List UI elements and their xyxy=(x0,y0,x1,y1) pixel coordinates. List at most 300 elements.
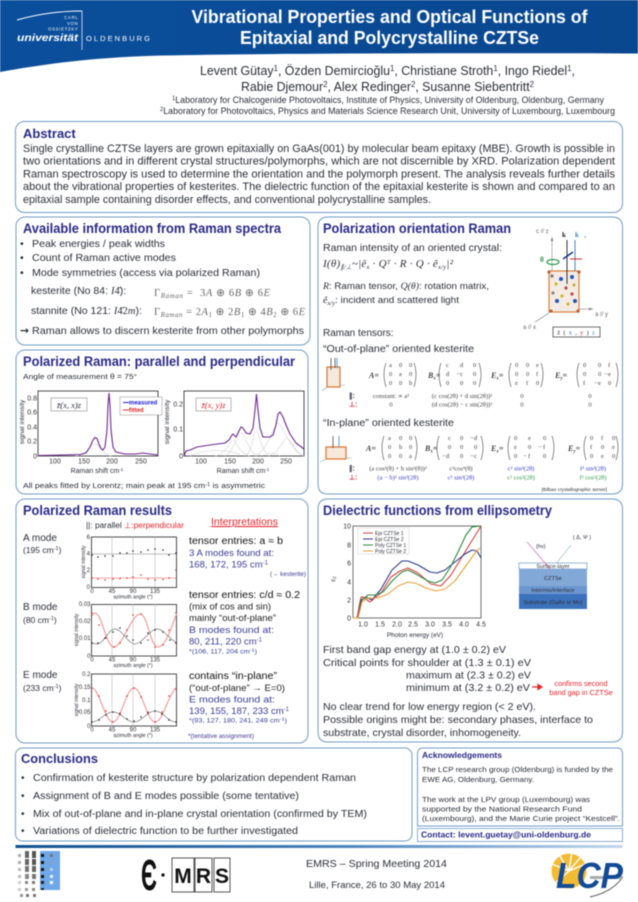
chart: z(x,y)z spectrum: 0.2 xyxy=(173,402,183,408)
icon: crystal unit cell with beams: a // x xyxy=(523,325,536,331)
table: in-plane intensities: ⊥: xyxy=(349,474,357,482)
table: in-plane intensities xyxy=(349,464,607,482)
intensity equation text: ê xyxy=(323,295,327,305)
table: in-plane intensities: c² sin²(2θ) xyxy=(448,474,474,482)
logo: E-MRS: M xyxy=(174,865,192,888)
tensor matrices: in-plane: 00a xyxy=(388,453,412,460)
interpretation: B mode: *(106, 117, 204 cm xyxy=(189,650,239,656)
chart: A mode: 0 xyxy=(90,589,94,595)
bullet list: Mode symmetries (access via polarized Raman) xyxy=(32,267,260,279)
kesterite and stannite formulas: 2 xyxy=(273,311,277,319)
panel: polarization orientation Raman xyxy=(318,217,622,494)
interpretation: A mode: 168, 172, 195 cm xyxy=(189,560,262,570)
authors and affiliations: , Ingo Riedel xyxy=(498,64,567,78)
diagram: ellipsometry layer stack: Substrate (GaAs or Mo) xyxy=(523,600,583,606)
tensor matrices: out-of-plane: 0a0 xyxy=(389,371,412,378)
logo: Universität Oldenburg: CARL xyxy=(64,15,78,20)
intensity equation text: |² xyxy=(446,258,454,270)
kesterite and stannite formulas: ⊕ 2 xyxy=(212,307,233,318)
chart: B mode: 0.02 xyxy=(79,619,91,625)
icon: in-plane cell xyxy=(320,436,352,462)
interpretation: E mode: (“out-of-plane” → E=0) xyxy=(189,683,285,693)
tensor matrices: in-plane: x xyxy=(495,450,499,454)
chart: dielectric function curves: 8 xyxy=(347,542,351,550)
intensity equation text: x xyxy=(366,264,370,271)
interpretation: E mode: ) xyxy=(285,718,287,724)
chart: B mode: 0 xyxy=(87,654,91,660)
polarization key: ||: parallel ⊥:perpendicular xyxy=(86,521,184,530)
interpretation: E mode: contains “in-plane” xyxy=(189,671,277,682)
diagram: ellipsometry layer stack: Surface-layer xyxy=(536,564,570,570)
kesterite and stannite formulas: ⊕ 4 xyxy=(245,307,266,318)
chart: E mode: 0.1 xyxy=(82,698,91,704)
chart: z(x,y)z spectrum: -1 xyxy=(265,467,270,472)
tensor matrices: in-plane: −d0−c xyxy=(442,453,477,460)
tensor matrices: in-plane: c0−d xyxy=(448,435,478,442)
intensity equation text: x/y xyxy=(326,301,336,307)
abstract body text: Single crystalline CZTSe layers are grown epitaxially on GaAs(001) by molecular beam epitaxy (MBE). Growth is possible in xyxy=(23,143,615,155)
tensor matrices: in-plane: x xyxy=(429,450,433,454)
panel: dielectric functions from ellipsometry xyxy=(318,499,622,742)
chart: dielectric function curves: 4.0 xyxy=(459,622,469,628)
chart: E mode: 0 xyxy=(90,728,94,734)
icon: crystal unit cell with beams: s xyxy=(584,234,586,239)
Raman tensor labels: Raman tensors: xyxy=(323,328,394,339)
chart: dielectric function curves: 6 xyxy=(347,560,351,568)
kesterite and stannite formulas xyxy=(31,285,306,319)
logo: Universität Oldenburg: universität xyxy=(17,32,79,44)
icon: crystal unit cell with beams: a // y xyxy=(595,312,608,318)
chart: B mode: azimuth angle (°) xyxy=(113,663,153,669)
tensor matrices: out-of-plane: B xyxy=(428,371,433,380)
chart: B mode: signal intensity xyxy=(74,613,80,646)
chart: z(x,x)z spectrum: 0.8 xyxy=(27,396,37,402)
panel: polarized Raman results xyxy=(16,499,308,743)
legend measured / fitted: fitted xyxy=(129,408,144,414)
abstract body text: Raman spectroscopy is used to determine the orientation and the polymorph present. The analysis reveals further details xyxy=(23,168,615,180)
table: out-of-plane intensities: ⊥: xyxy=(349,400,357,408)
chart: B mode xyxy=(74,602,177,669)
tensor matrices: in-plane: 000 xyxy=(448,444,477,451)
authors and affiliations: , Özden Demircioğlu xyxy=(278,64,390,78)
bullet list: • xyxy=(20,267,24,279)
kesterite and stannite formulas: Raman xyxy=(160,311,183,319)
chart: E mode: 0 xyxy=(87,724,91,730)
contact box xyxy=(418,828,622,842)
interpretation: E mode xyxy=(189,671,290,724)
icon: crystal unit cell with beams: c // z xyxy=(536,229,549,235)
kesterite and stannite formulas: = xyxy=(184,288,196,299)
heading: polarized Raman: Polarized Raman: parallel and perpendicular xyxy=(23,354,296,369)
interpretation: A mode: (→ kesterite) xyxy=(270,571,306,578)
kesterite and stannite formulas: B xyxy=(266,307,273,318)
chart: z(x,y)z spectrum: signal intensity xyxy=(164,399,171,444)
legend measured / fitted: measured xyxy=(129,400,158,406)
heading: dielectric functions: Dielectric functions from ellipsometry xyxy=(323,503,552,518)
mode labels: (195 cm xyxy=(23,545,54,555)
fit note: is asymmetric xyxy=(210,481,265,490)
tensor matrices: out-of-plane: E xyxy=(491,371,496,380)
diagram: ellipsometry layer stack: (hν) xyxy=(536,544,546,550)
conclusions list: • xyxy=(21,809,25,820)
conclusions list: • xyxy=(21,791,25,802)
intensity equation text: ~|ê xyxy=(352,258,366,270)
tensor matrices: in-plane: 0−f0 xyxy=(514,453,546,460)
acknowledgement text: EWE AG, Oldenburg, Germany. xyxy=(422,775,534,784)
chart: E mode: azimuth angle (°) xyxy=(113,733,153,739)
panel: acknowledgements xyxy=(418,748,622,826)
mode labels: A mode xyxy=(23,533,57,544)
mode labels: ) xyxy=(59,683,62,693)
authors and affiliations: 1 xyxy=(567,64,572,73)
chart: B mode: 0.03 xyxy=(79,602,91,608)
logo: Universität Oldenburg: OSSIETZKY xyxy=(48,27,78,32)
diagram: ellipsometry layer stack: Intermix/Interface xyxy=(531,588,575,594)
chart: A mode: 2 xyxy=(87,568,91,574)
fit note: -1 xyxy=(205,482,211,488)
chart: dielectric function curves: Photon energy (eV) xyxy=(387,632,443,639)
logo: E-MRS: S xyxy=(215,865,229,888)
chart: dielectric function curves: 3.0 xyxy=(425,622,435,628)
table: in-plane intensities: c²cos⁴(θ) xyxy=(449,466,473,472)
table: in-plane intensities: (a − b)² sin²(2θ) xyxy=(377,474,419,482)
authors and affiliations: Laboratory for Photovoltaics, Physics and Materials Science Research Unit, University of Luxembourg, Luxembourg xyxy=(163,106,615,116)
kesterite and stannite formulas: A xyxy=(201,307,209,318)
table: out-of-plane intensities: 0 xyxy=(520,393,524,400)
logo: Universität Oldenburg xyxy=(17,11,150,50)
table: out-of-plane intensities: 0 xyxy=(588,393,592,400)
tensor matrices: out-of-plane: y xyxy=(559,376,563,382)
chart: dielectric function curves: 4 xyxy=(347,580,351,586)
mode labels: ) xyxy=(59,545,62,555)
chart: dielectric function curves: 10 xyxy=(343,524,351,530)
beam geometry label: z̄ ( x , y ) z xyxy=(557,330,596,336)
title: Vibrational Properties and Optical Functions of xyxy=(192,7,588,27)
table: in-plane intensities: c² sin²(2θ) xyxy=(508,466,534,472)
tensor matrices: in-plane: 0b0 xyxy=(388,444,412,451)
chart: z(x,x)z spectrum: 250 xyxy=(135,458,147,466)
chart: A mode: azimuth angle (°) xyxy=(113,594,153,600)
heading: conclusions: Conclusions xyxy=(21,752,98,766)
authors and affiliations: 1 xyxy=(390,64,395,73)
logo: E-MRS xyxy=(141,851,230,900)
tensor matrices: in-plane: 0e0 xyxy=(590,453,615,460)
chart: dielectric function curves: 0 xyxy=(347,616,351,622)
tensor matrices: out-of-plane: x xyxy=(495,376,499,382)
bullet list: Count of Raman active modes xyxy=(32,252,176,264)
intensity equation text: I(θ) xyxy=(323,258,340,270)
conclusions list xyxy=(21,773,367,837)
table: out-of-plane intensities: ∥: xyxy=(349,392,355,400)
panel: available information from Raman spectra xyxy=(16,217,310,345)
conference info xyxy=(306,858,447,891)
chart: z(x,x)z spectrum: 200 xyxy=(106,458,118,466)
tensor matrices: in-plane xyxy=(365,435,618,460)
chart: dielectric function curves: 1.5 xyxy=(375,622,385,628)
chart: dielectric function curves xyxy=(330,524,486,639)
chart: B mode: 0 xyxy=(90,658,94,664)
chart: z(x,x)z spectrum: Raman shift cm xyxy=(71,468,119,475)
logo: Universität Oldenburg: OLDENBURG xyxy=(86,34,150,43)
source note: [Bilbao crystallographic server] xyxy=(542,487,607,493)
tensor matrices: in-plane: A= xyxy=(365,444,376,453)
chart: A mode: 0 xyxy=(87,585,91,591)
chart: dielectric function curves: ε xyxy=(330,579,337,582)
icon: crystal unit cell with beams xyxy=(523,229,608,337)
chart: E mode: 0.2 xyxy=(82,672,91,678)
tensor matrices: in-plane: = xyxy=(499,444,504,453)
tensor matrices: in-plane: a00 xyxy=(388,435,412,442)
logo: E-MRS: R xyxy=(196,865,211,888)
chart: A mode: signal intensity xyxy=(81,545,87,578)
low energy discussion xyxy=(323,701,593,739)
intensity equation text: Raman intensity of an oriented crystal: xyxy=(323,242,502,254)
chart: z(x,x)z spectrum: 0.2 xyxy=(27,438,37,446)
authors and affiliations: 1 xyxy=(493,64,498,73)
in-plane label: “In-plane” oriented kesterite xyxy=(323,418,454,429)
tensor matrices: in-plane: = xyxy=(576,444,581,453)
legend measured / fitted xyxy=(120,397,162,415)
heading: polarization orientation: Polarization orientation Raman xyxy=(323,221,511,236)
band gap and critical points text xyxy=(323,644,531,694)
chart legend: Epi CZTSe 1 xyxy=(375,531,404,537)
chart: B mode: 90 xyxy=(130,658,137,664)
kesterite and stannite formulas: Γ xyxy=(154,307,160,318)
chart: z(x,y)z spectrum: 150 xyxy=(224,458,236,466)
authors and affiliations xyxy=(160,64,615,116)
chart: B mode: 135 xyxy=(150,658,161,664)
mode labels: E mode xyxy=(23,670,58,681)
contact box: Contact: levent.guetay@uni-oldenburg.de xyxy=(421,830,591,840)
tensor matrices: out-of-plane: cd0 xyxy=(446,362,476,369)
kesterite and stannite formulas: Raman xyxy=(160,292,184,300)
bullet list: • xyxy=(20,238,24,250)
tensor matrices: in-plane: y xyxy=(572,450,576,454)
conclusions list: • xyxy=(21,826,25,837)
tensor matrices: out-of-plane: = xyxy=(563,371,568,380)
tensor matrices: in-plane: e0−f xyxy=(514,444,546,451)
chart: z(x,x)z spectrum: 150 xyxy=(78,458,90,466)
chart: E mode: 0.15 xyxy=(79,685,91,691)
chart: z(x,x)z spectrum: -1 xyxy=(119,467,124,472)
conference info: Lille, France, 26 to 30 May 2014 xyxy=(309,880,445,891)
chart: dielectric function curves: 4.5 xyxy=(476,622,486,628)
bullet list: Peak energies / peak widths xyxy=(32,238,165,250)
icon: crystal unit cell with beams: k⃗ xyxy=(575,231,584,239)
chart: dielectric function curves: 1.0 xyxy=(358,622,368,628)
interpretation: B mode: B modes found at: xyxy=(189,625,274,636)
tensor matrices: in-plane: E xyxy=(568,444,573,453)
title xyxy=(192,7,588,48)
authors and affiliations: , Alex Redinger xyxy=(327,80,411,94)
table: out-of-plane intensities: 0 xyxy=(520,402,524,408)
chart: z(x,y)z spectrum: 0.1 xyxy=(173,426,183,434)
table: out-of-plane intensities: (d cos(2θ) − c sin(2θ))² xyxy=(432,402,492,408)
intensity equation text: x/y xyxy=(437,264,446,271)
logo: Universität Oldenburg: VON xyxy=(67,21,78,26)
chart legend xyxy=(358,528,409,555)
mode labels: (233 cm xyxy=(23,683,54,693)
intensity equation text: : incident and scattered light xyxy=(335,295,460,305)
chart: E mode: 45 xyxy=(109,728,116,734)
chart: E mode: 0.05 xyxy=(79,710,91,716)
table: in-plane intensities: f² cos²(2θ) xyxy=(579,474,607,482)
chart legend: Poly CZTSe 1 xyxy=(375,543,406,549)
chart: z(x,x)z spectrum: 0 xyxy=(33,454,37,460)
interpretation: B mode: ) xyxy=(255,650,257,656)
fit note: All peaks fitted by Lorentz; main peak at 195 cm xyxy=(23,481,187,490)
interpretation: A mode: -1 xyxy=(263,560,269,566)
band gap and critical points text: minimum at (3.2 ± 0.2) eV xyxy=(406,682,530,694)
mode labels: -1 xyxy=(49,616,54,622)
kesterite and stannite formulas: 3A ⊕ 6B ⊕ 6E xyxy=(200,288,270,299)
chart: z(x,y)z spectrum: 100 xyxy=(195,458,207,466)
band gap and critical points text: First band gap energy at (1.0 ± 0.2) eV xyxy=(323,644,506,656)
logo: E-MRS: Є xyxy=(141,851,157,900)
conclusions list: • xyxy=(21,773,25,784)
chart: A mode xyxy=(81,535,177,600)
tensor matrices: out-of-plane: 00e xyxy=(515,362,539,369)
low energy discussion: substrate, crystal disorder, inhomogeneity. xyxy=(323,727,521,739)
interpretation: A mode: 3 A modes found at: xyxy=(189,548,274,559)
table: in-plane intensities: ∥: xyxy=(349,464,355,472)
authors and affiliations: 2 xyxy=(160,107,164,113)
conclusions list: Assignment of B and E modes possible (some tentative) xyxy=(33,791,299,802)
kesterite and stannite formulas: E xyxy=(298,307,306,318)
table: in-plane intensities: (a cos²(θ) + b sin²(θ))² xyxy=(369,466,427,472)
mode labels: -1 xyxy=(54,546,59,552)
panel: polarized Raman parallel and perpendicular xyxy=(16,350,308,494)
tensor matrices: in-plane: E xyxy=(491,444,496,453)
interpretation: A mode: tensor entries: a ≈ b xyxy=(189,536,283,547)
chart: dielectric function curves: 3.5 xyxy=(442,622,452,628)
interpretation: E mode: E modes found at: xyxy=(189,694,275,706)
tensor matrices: out-of-plane: x xyxy=(432,376,436,382)
tensor matrices: out-of-plane: A= xyxy=(368,371,379,380)
tensor matrices: out-of-plane: a00 xyxy=(389,362,412,369)
interpretation: B mode: -1 xyxy=(257,638,263,644)
logo: dotted square xyxy=(18,851,60,897)
mode labels: (80 cm xyxy=(23,615,49,625)
mode labels: B mode xyxy=(23,602,58,613)
acknowledgement text: The LCP research group (Oldenburg) is funded by the xyxy=(422,765,613,774)
panel: conclusions xyxy=(16,748,412,841)
kesterite and stannite formulas: kesterite (No 84: I4̄): xyxy=(31,285,126,297)
chart: E mode: 90 xyxy=(130,728,137,734)
chart: z(x,x)z spectrum: 100 xyxy=(49,458,61,466)
kesterite and stannite formulas: 1 xyxy=(241,311,245,319)
tensor matrices: in-plane: 0f0 xyxy=(590,435,615,442)
chart legend: Epi CZTSe 2 xyxy=(375,537,404,543)
interpretation: E mode: *(93, 127, 180, 241, 249 cm xyxy=(189,718,263,724)
heading: results: Polarized Raman results xyxy=(23,503,172,518)
abstract body text: two orientations and in different crystal structures/polymorphs, which are not discernible by XRD. Polarization dependent xyxy=(23,156,615,168)
tensor matrices: out-of-plane: f−e0 xyxy=(583,380,611,387)
interpretation: E mode: -1 xyxy=(280,716,285,722)
sample label z(x,x)z: z̄(x, x)z xyxy=(56,400,82,410)
conclusions list: Confirmation of kesterite structure by polarization dependent Raman xyxy=(33,773,356,784)
acknowledgement text: supported by the National Research Fund xyxy=(422,804,582,814)
tensor matrices: out-of-plane: d−c0 xyxy=(446,371,476,378)
chart: A mode: 135 xyxy=(150,589,161,595)
Raman tensor labels xyxy=(323,328,474,355)
authors and affiliations: 1 xyxy=(274,64,278,73)
abstract body text: about the vibrational properties of kesterites. The dielectric function of the epitaxial kesterite is shown and compared to an xyxy=(23,181,615,193)
diagram: ellipsometry layer stack: CZTSe xyxy=(544,576,562,582)
interpretation: B mode: (mix of cos and sin) xyxy=(189,602,271,612)
band gap and critical points text: Critical points for shoulder at (1.3 ± 0.1) eV xyxy=(323,657,531,669)
tensor matrices: out-of-plane: ef0 xyxy=(515,380,539,387)
chart: E mode: 135 xyxy=(150,728,161,734)
intensity equation text: · Q xyxy=(370,258,387,270)
callout: second band gap: band gap in CZTSe xyxy=(549,688,613,697)
authors and affiliations: Rabie Djemour xyxy=(241,80,324,94)
table: out-of-plane intensities: 0 xyxy=(389,402,393,408)
interpretation: B mode: mainly “out-of-plane” xyxy=(189,613,276,623)
authors and affiliations: 2 xyxy=(323,80,328,89)
chart: z(x,y)z spectrum: 200 xyxy=(252,458,264,466)
chart: z(x,x)z spectrum: 0.6 xyxy=(27,410,37,416)
tensor matrices: out-of-plane: 00b xyxy=(389,380,412,387)
kesterite and stannite formulas: stannite (No 121: I4̄2m): xyxy=(31,305,142,317)
logo: LCP: LCP xyxy=(556,855,624,896)
bullet list: • xyxy=(20,252,24,264)
acknowledgement text xyxy=(422,765,620,823)
icon: out-of-plane cell xyxy=(322,358,345,391)
tensor matrices: out-of-plane: 00−e xyxy=(583,371,611,378)
chart: dielectric function curves: 2 xyxy=(347,598,351,604)
abstract body text: epitaxial sample containing disorder effects, and conventional polycrystalline samples. xyxy=(23,194,431,206)
intensity equation text: T xyxy=(387,259,391,266)
chart: dielectric function curves: 2 xyxy=(332,576,337,579)
table: out-of-plane intensities: 0 xyxy=(588,402,592,408)
table: in-plane intensities: f² sin²(2θ) xyxy=(580,466,606,472)
diagram: ellipsometry layer stack: ( Δ, Ψ ) xyxy=(573,535,591,541)
chart: z(x,x)z spectrum: 0.4 xyxy=(27,424,37,432)
chart: z(x,x)z spectrum xyxy=(19,391,162,475)
tensor matrices: in-plane: B xyxy=(425,444,430,453)
chart: z(x,y)z spectrum: 250 xyxy=(280,458,292,466)
chart: E mode xyxy=(74,672,177,739)
title: Epitaxial and Polycrystalline CZTSe xyxy=(240,28,539,48)
low energy discussion: No clear trend for low energy region (< 2 eV). xyxy=(323,701,536,713)
callout: second band gap: confirms second xyxy=(554,679,608,688)
heading: interpretations: Interpretations xyxy=(211,516,278,528)
footer gradient bar xyxy=(16,845,622,848)
tensor matrices: out-of-plane: 00f xyxy=(583,362,611,369)
band gap and critical points text: maximum at (2.3 ± 0.2) eV xyxy=(406,670,531,682)
interpretation: B mode xyxy=(189,590,300,656)
authors and affiliations: Laboratory for Chalcogenide Photovoltaics, Institute of Physics, University of Oldenburg, Oldenburg, Germany xyxy=(175,95,604,105)
interpretation: B mode: 80, 211, 220 cm xyxy=(189,636,256,648)
low energy discussion: Possible origins might be: secondary phases, interface to xyxy=(323,714,593,726)
bullet list xyxy=(20,238,260,279)
icon: crystal unit cell with beams: θ xyxy=(540,257,544,264)
Raman tensor labels: “Out-of-plane” oriented kesterite xyxy=(323,344,474,355)
authors and affiliations: 2 xyxy=(411,80,416,89)
authors and affiliations: 2 xyxy=(530,80,535,89)
heading: acknowledgements: Acknowledgements xyxy=(422,751,503,760)
angle note: Angle of measurement θ = 75° xyxy=(23,372,137,381)
header banner xyxy=(0,0,638,72)
conclusion line with arrow: → Raman allows to discern kesterite from other polymorphs xyxy=(20,325,304,337)
tensor matrices: in-plane: = xyxy=(433,444,438,453)
authors and affiliations: , Susanne Siebentritt xyxy=(415,80,530,94)
conference info: EMRS – Spring Meeting 2014 xyxy=(306,858,447,870)
icon: crystal unit cell with beams: k⃗ xyxy=(562,231,571,239)
authors and affiliations: 1 xyxy=(172,96,176,102)
kesterite and stannite formulas: B xyxy=(234,307,241,318)
